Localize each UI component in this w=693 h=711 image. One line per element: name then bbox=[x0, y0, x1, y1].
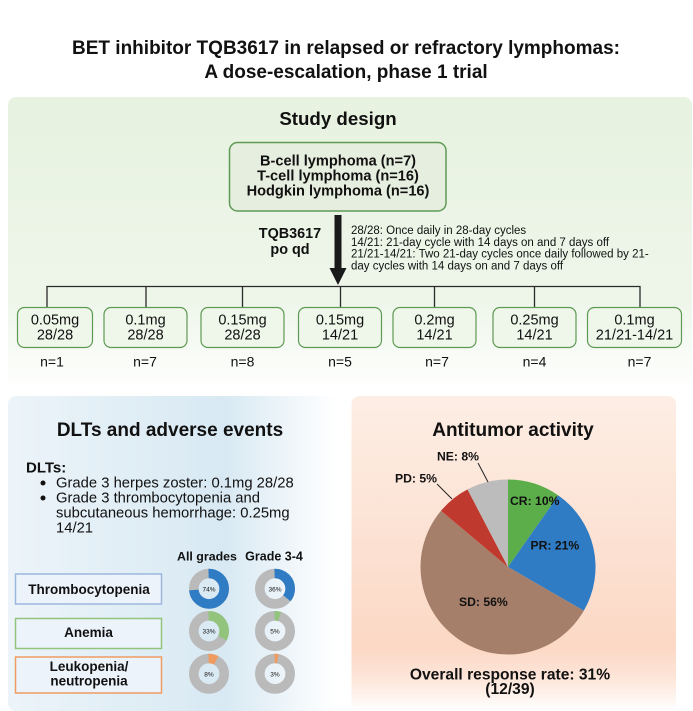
dose arm 5: n=7 bbox=[425, 354, 449, 370]
dose arm 4: n=5 bbox=[328, 354, 352, 370]
panel: DLTs and adverse events bbox=[8, 396, 336, 711]
box: lymphoma cohorts: B-cell lymphoma (n=7) bbox=[260, 154, 416, 170]
dose arm 1: 0.05mg bbox=[31, 312, 79, 328]
pie labels: CR: 10% bbox=[510, 494, 560, 508]
heading: DLTs and adverse events: DLTs and adverse events bbox=[57, 420, 283, 441]
donut: leukopenia grade 3-4 3%: 3% bbox=[270, 672, 280, 678]
schedule notes: 14/21: 21-day cycle with 14 days on and 7 days off bbox=[351, 237, 610, 249]
label: anemia bbox=[16, 618, 162, 648]
heading: antitumor activity: Antitumor activity bbox=[432, 420, 594, 441]
label: anemia: Anemia bbox=[64, 625, 113, 640]
panel: study design bbox=[8, 97, 692, 390]
DLT list: Grade 3 thrombocytopenia and bbox=[56, 490, 260, 506]
dose arm 4: 14/21 bbox=[322, 328, 358, 344]
box: lymphoma cohorts: T-cell lymphoma (n=16) bbox=[257, 168, 419, 184]
box: lymphoma cohorts bbox=[230, 142, 446, 211]
dose arm 1: 28/28 bbox=[37, 328, 73, 344]
label: drug and route bbox=[259, 226, 321, 258]
dose arm 7: 0.1mg bbox=[614, 312, 655, 328]
overall response rate: (12/39) bbox=[485, 681, 535, 698]
label: drug and route: po qd bbox=[270, 242, 310, 258]
box: lymphoma cohorts: Hodgkin lymphoma (n=16) bbox=[247, 184, 430, 200]
overall response rate: Overall response rate: 31% bbox=[410, 666, 610, 684]
dose arm 2: n=7 bbox=[133, 354, 157, 370]
donut: thrombocytopenia all grades 74% bbox=[194, 574, 224, 604]
donut: thrombocytopenia all grades 74%: 74% bbox=[202, 586, 216, 594]
pie labels: NE: 8% bbox=[437, 450, 479, 464]
dose arm 6: 0.25mg bbox=[510, 312, 559, 328]
DLT list: 14/21 bbox=[56, 520, 93, 536]
donut: thrombocytopenia grade 3-4 36% bbox=[260, 574, 290, 604]
panel: antitumor activity bbox=[352, 396, 676, 711]
dose arm 1: n=1 bbox=[40, 354, 64, 370]
label: thrombocytopenia: Thrombocytopenia bbox=[28, 582, 150, 597]
dose arm 4 bbox=[298, 308, 382, 370]
DLT list: DLTs: bbox=[26, 460, 66, 476]
column header: all grades: All grades bbox=[177, 550, 237, 564]
donut: anemia all grades 33% bbox=[194, 616, 224, 646]
title bbox=[72, 38, 620, 83]
DLT list: subcutaneous hemorrhage: 0.25mg bbox=[56, 506, 290, 522]
dose arm 6: n=4 bbox=[523, 354, 547, 370]
dose arm 7: n=7 bbox=[628, 354, 652, 370]
pie labels: PD: 5% bbox=[395, 472, 437, 486]
label: leukopenia/neutropenia: neutropenia bbox=[50, 674, 128, 688]
dose arm 7 bbox=[588, 308, 682, 370]
donut: anemia all grades 33%: 33% bbox=[202, 628, 216, 636]
dose arm 1 bbox=[18, 308, 92, 370]
tree connector bbox=[47, 286, 640, 307]
donut: leukopenia grade 3-4 3% bbox=[260, 658, 290, 689]
schedule notes: 21/21-14/21: Two 21-day cycles once daily followed by 21- bbox=[351, 248, 649, 260]
schedule notes: 28/28: Once daily in 28-day cycles bbox=[351, 225, 526, 237]
dose arm 6: 14/21 bbox=[516, 328, 553, 344]
pie labels: SD: 56% bbox=[459, 595, 508, 609]
DLT list bbox=[26, 460, 294, 536]
dose arm 3: 28/28 bbox=[224, 328, 261, 344]
label: drug and route: TQB3617 bbox=[259, 226, 321, 242]
arrow: treatment bbox=[330, 215, 346, 285]
pie labels bbox=[395, 450, 579, 609]
pie chart: response bbox=[395, 450, 596, 655]
overall response rate bbox=[410, 666, 610, 698]
schedule notes bbox=[351, 225, 649, 272]
donut: leukopenia all grades 8% bbox=[194, 658, 224, 689]
dose arm 7: 21/21-14/21 bbox=[596, 328, 673, 344]
label: leukopenia/neutropenia bbox=[16, 657, 162, 693]
pie labels: PR: 21% bbox=[530, 538, 579, 552]
label: thrombocytopenia bbox=[16, 574, 162, 604]
dose arm 2: 28/28 bbox=[127, 328, 164, 344]
dose arm 3 bbox=[201, 308, 284, 370]
dose arm 5 bbox=[393, 308, 476, 370]
dose arm 2 bbox=[104, 308, 187, 370]
title: BET inhibitor TQB3617 in relapsed or refractory lymphomas: bbox=[72, 38, 620, 59]
dose arm 2: 0.1mg bbox=[125, 312, 166, 328]
donut: thrombocytopenia grade 3-4 36%: 36% bbox=[268, 586, 282, 594]
dose arm 5: 0.2mg bbox=[414, 312, 455, 328]
dose arm 4: 0.15mg bbox=[316, 312, 364, 328]
dose arm 6 bbox=[493, 308, 576, 370]
leader lines bbox=[437, 463, 488, 499]
schedule notes: day cycles with 14 days on and 7 days off bbox=[351, 260, 564, 272]
donut: anemia grade 3-4 5% bbox=[260, 616, 290, 646]
dose arm 3: 0.15mg bbox=[218, 312, 267, 328]
heading: study design: Study design bbox=[279, 108, 397, 129]
donut: anemia grade 3-4 5%: 5% bbox=[270, 628, 280, 636]
dose arm 3: n=8 bbox=[231, 354, 255, 370]
title: A dose-escalation, phase 1 trial bbox=[204, 62, 488, 83]
dose arm 5: 14/21 bbox=[416, 328, 453, 344]
donut: leukopenia all grades 8%: 8% bbox=[204, 672, 214, 678]
label: leukopenia/neutropenia: Leukopenia/ bbox=[50, 659, 129, 674]
DLT list: Grade 3 herpes zoster: 0.1mg 28/28 bbox=[56, 476, 294, 492]
column header: grade 3-4: Grade 3-4 bbox=[245, 550, 303, 564]
